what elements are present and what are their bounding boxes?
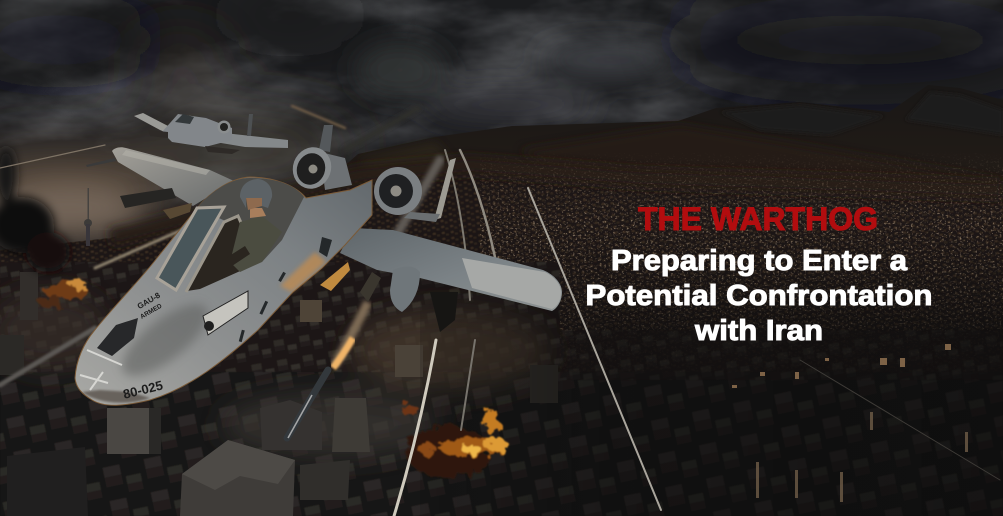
small wingman A-10 aircraft (134, 113, 288, 154)
right side lit facades (756, 412, 968, 502)
nose markings (80, 291, 248, 390)
foreground buildings (0, 272, 558, 516)
dark cloud masses (0, 0, 1003, 85)
tail fin (319, 125, 333, 152)
city foreground (0, 372, 1003, 516)
left wing with stores (86, 147, 234, 219)
aircraft stencils: GAU-8 (136, 290, 162, 311)
explosion left (39, 280, 87, 308)
right wing (340, 228, 562, 312)
background sky with clouds (0, 0, 1003, 300)
mountain range (340, 85, 1003, 300)
headline: with Iran (694, 315, 823, 347)
canopy and pilot (157, 178, 304, 292)
headline: Preparing to Enter a (611, 245, 908, 277)
engine nacelle left (320, 152, 352, 190)
dark vignette over right side (420, 230, 1003, 516)
soft city skyline edge (110, 165, 1003, 238)
warm horizon glow (0, 43, 350, 229)
headline: Potential Confrontation (586, 280, 932, 312)
tail fin right (434, 158, 456, 220)
headline (586, 245, 932, 347)
Milad tower (84, 188, 92, 246)
explosion bottom center (402, 403, 509, 478)
main A-10 Warthog aircraft (75, 125, 562, 405)
aircraft stencils: ARMED (139, 303, 164, 321)
city far and middle distance (0, 174, 1003, 330)
aircraft stencils (121, 290, 164, 402)
engine left (287, 142, 337, 194)
city mid distance (0, 262, 560, 392)
smoke and missile trails (0, 106, 1000, 516)
title: The Warthog: THE WARTHOG (638, 201, 878, 237)
engine right (374, 167, 440, 222)
fuselage (75, 177, 372, 405)
insignia and panel marks (239, 237, 332, 342)
smoke plume left (0, 147, 70, 272)
missile with flame (287, 302, 368, 438)
city lower right transition (560, 330, 1003, 380)
aircraft stencils: 80-025 (121, 377, 164, 402)
underwing stores (320, 262, 458, 332)
warm window speckle (480, 156, 1003, 347)
warm speckle cluster (732, 344, 951, 388)
warm lit mid city (0, 290, 550, 457)
